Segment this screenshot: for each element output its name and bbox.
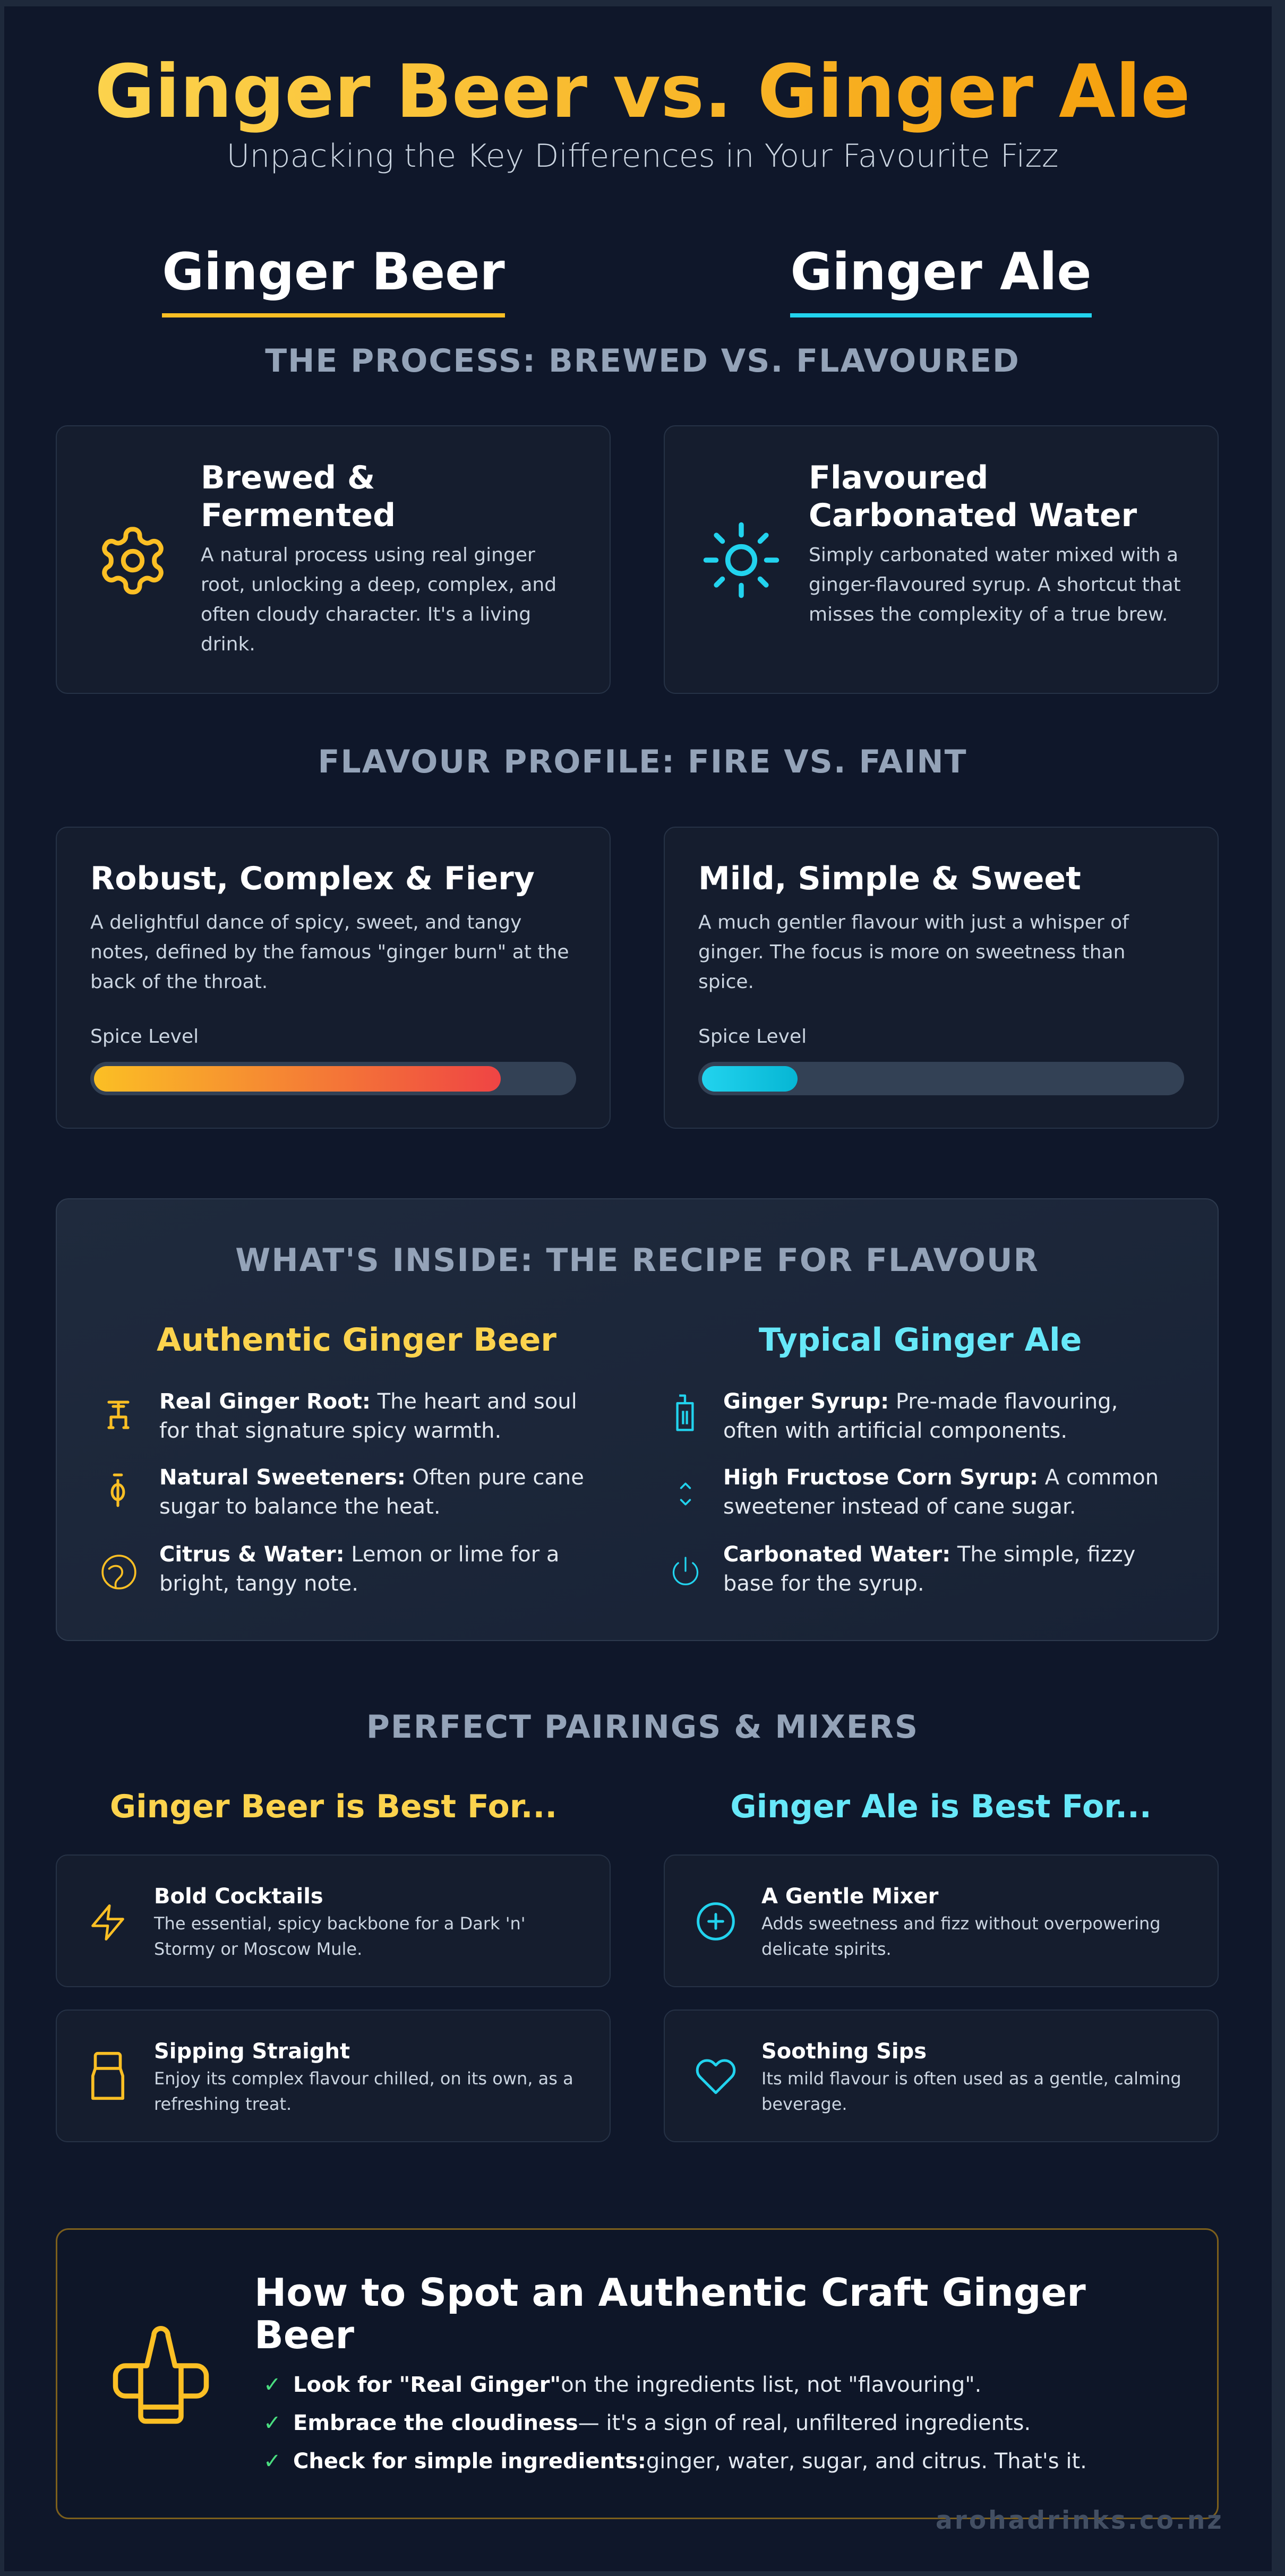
card: soothing sips: Soothing Sips	[761, 2039, 927, 2064]
panel: brewed card	[56, 425, 611, 694]
icon: cup	[91, 2051, 124, 2100]
panel: robust card	[56, 827, 611, 1129]
item: sweeteners: Natural Sweeteners: Often pure cane sugar to balance the heat.	[159, 1465, 584, 1519]
icon: lightning	[91, 1904, 124, 1940]
column header: ginger beer: Ginger Beer	[162, 242, 505, 302]
text: flavoured: Flavoured Carbonated Water	[809, 459, 1137, 534]
panel: recipe	[56, 1198, 1219, 1641]
checklist: ✓	[263, 2449, 281, 2474]
section heading: process: THE PROCESS: BREWED VS. FLAVOURED	[265, 342, 1020, 380]
callout: authentic craft ginger beer	[56, 2228, 1219, 2519]
icon: plus circle	[697, 1902, 735, 1940]
callout heading: How to Spot an Authentic Craft Ginger Beer	[254, 2270, 1086, 2357]
panel: mild card	[664, 827, 1219, 1129]
item: syrup: Ginger Syrup: Pre-made flavouring, often with artificial components.	[723, 1389, 1118, 1443]
card: gentle mixer	[664, 1854, 1219, 1987]
card: gentle mixer: Adds sweetness and fizz without overpowering delicate spirits.	[761, 1913, 1161, 1959]
checklist: Look for "Real Ginger"on the ingredients list, not "flavouring".	[293, 2373, 981, 2397]
text: brewed: Brewed & Fermented	[201, 459, 396, 534]
card: sipping straight: Enjoy its complex flavour chilled, on its own, as a refreshing treat.	[154, 2068, 573, 2114]
item: carbonated water: Carbonated Water: The simple, fizzy base for the syrup.	[723, 1542, 1135, 1596]
card: sipping straight: Sipping Straight	[154, 2039, 350, 2064]
checklist: Check for simple ingredients:ginger, water, sugar, and citrus. That's it.	[293, 2449, 1087, 2474]
subhead: ginger beer best for: Ginger Beer is Best For...	[110, 1788, 557, 1825]
icon: bottle	[113, 2326, 209, 2424]
card: bold cocktails	[56, 1854, 611, 1987]
panel: robust card: A delightful dance of spicy, sweet, and tangy notes, defined by the famous "ginger burn" at the back of the throat.	[90, 912, 569, 993]
text: brewed: A natural process using real ginger root, unlocking a deep, complex, and often cloudy character. It's a living drink.	[201, 544, 556, 655]
section heading: flavour: FLAVOUR PROFILE: FIRE VS. FAINT	[318, 743, 967, 780]
bar: spice low	[698, 1062, 1184, 1095]
panel: robust card: Robust, Complex & Fiery	[90, 860, 535, 897]
icon: sun	[703, 522, 779, 598]
checklist: ✓	[263, 2411, 281, 2435]
card: bold cocktails: Bold Cocktails	[154, 1884, 323, 1909]
icon: gear	[102, 527, 164, 595]
text: flavoured	[809, 459, 1181, 625]
recipe heading: WHAT'S INSIDE: THE RECIPE FOR FLAVOUR	[235, 1242, 1039, 1279]
subhead: typical: Typical Ginger Ale	[759, 1321, 1082, 1359]
panel: mild card: A much gentler flavour with just a whisper of ginger. The focus is more on sweetness than spice.	[698, 912, 1129, 993]
checklist	[263, 2373, 1087, 2474]
card: bold cocktails: The essential, spicy backbone for a Dark 'n' Stormy or Moscow Mule.	[154, 1913, 526, 1959]
column header: ginger ale: Ginger Ale	[791, 242, 1091, 302]
card: sipping straight	[56, 2010, 611, 2142]
panel: robust card: Spice Level	[90, 1026, 199, 1047]
checklist: Embrace the cloudiness— it's a sign of real, unfiltered ingredients.	[293, 2411, 1031, 2435]
card: gentle mixer: A Gentle Mixer	[761, 1884, 938, 1909]
card: soothing sips	[664, 2010, 1219, 2142]
subhead: authentic: Authentic Ginger Beer	[157, 1321, 556, 1359]
subtitle: Unpacking the Key Differences in Your Favourite Fizz	[227, 138, 1058, 175]
panel: mild card: Mild, Simple & Sweet	[698, 860, 1081, 897]
text: brewed	[201, 459, 556, 655]
panel: flavoured card	[664, 425, 1219, 694]
text: flavoured: Simply carbonated water mixed with a ginger-flavoured syrup. A shortcut that misses the complexity of a true brew.	[809, 544, 1181, 625]
subhead: ginger ale best for: Ginger Ale is Best For...	[730, 1788, 1152, 1825]
section heading: pairings: PERFECT PAIRINGS & MIXERS	[366, 1708, 919, 1746]
item: citrus: Citrus & Water: Lemon or lime for a bright, tangy note.	[159, 1542, 559, 1596]
panel: mild card: Spice Level	[698, 1026, 807, 1047]
card: soothing sips: Its mild flavour is often used as a gentle, calming beverage.	[761, 2068, 1181, 2114]
item: ginger root: Real Ginger Root: The heart and soul for that signature spicy warmth.	[159, 1389, 577, 1443]
icon: heart	[696, 2059, 736, 2094]
watermark: arohadrinks.co.nz	[936, 2506, 1224, 2535]
title: Ginger Beer vs. Ginger Ale	[95, 49, 1190, 134]
checklist: ✓	[263, 2373, 281, 2397]
bar: spice high	[90, 1062, 576, 1095]
item: hfcs: High Fructose Corn Syrup: A common sweetener instead of cane sugar.	[723, 1465, 1159, 1519]
